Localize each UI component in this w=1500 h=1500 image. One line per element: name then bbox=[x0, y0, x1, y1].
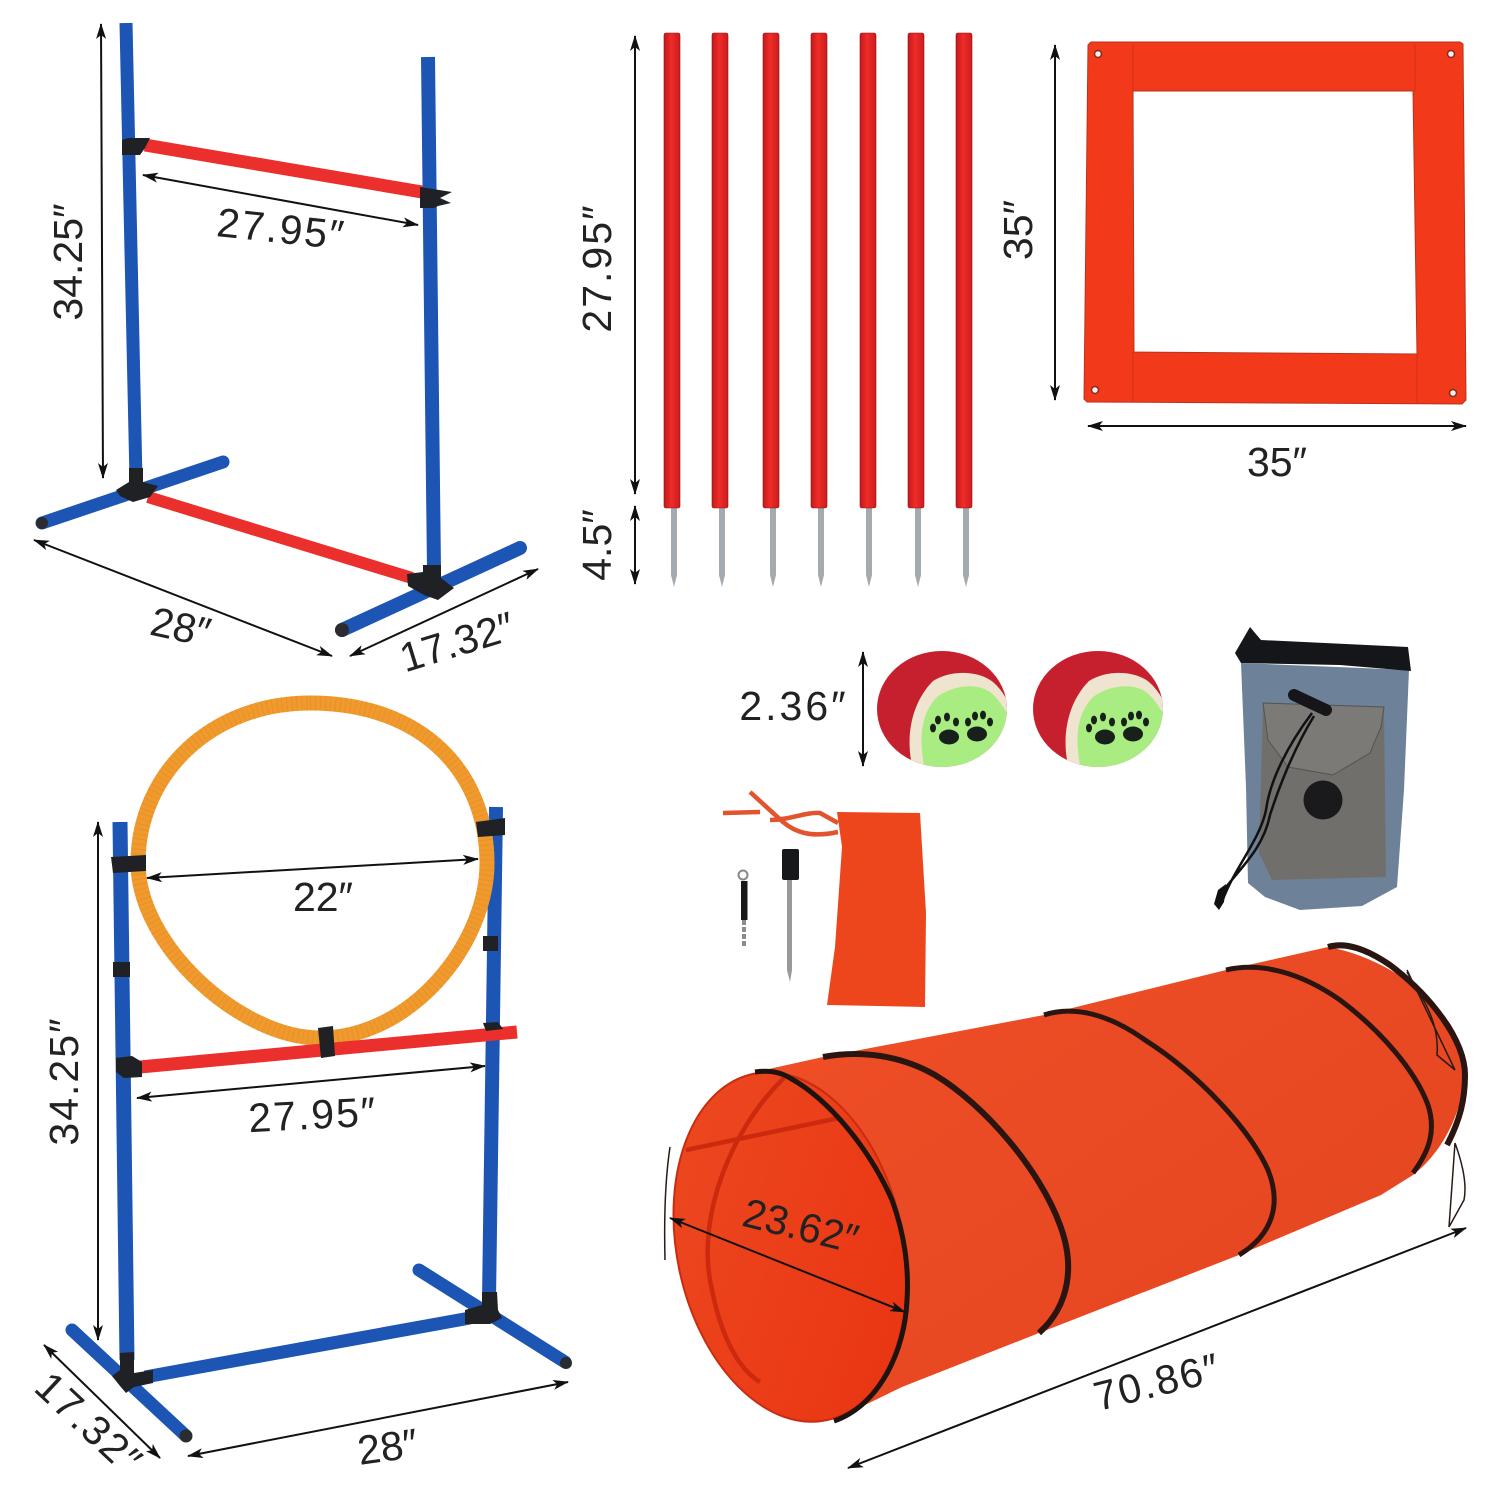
dimension: diameter 23.62 bbox=[670, 1189, 905, 1312]
dimension: diameter 23.62: 23.62″ bbox=[738, 1189, 863, 1262]
dimension: base 28: 28″ bbox=[355, 1420, 421, 1474]
dimension: length 70.86: 70.86″ bbox=[1089, 1344, 1225, 1420]
dimension: bar width 27.95: 27.95″ bbox=[215, 199, 348, 258]
dimension: hoop 22 bbox=[147, 859, 478, 920]
dimension: bar 27.95: 27.95″ bbox=[247, 1088, 379, 1141]
dimension: spike 4.5 bbox=[574, 506, 635, 584]
dimension: ball 2.36 bbox=[739, 652, 863, 766]
tunnel straps and strings bbox=[665, 970, 1465, 1260]
dimension: depth 17.32: 17.32″ bbox=[394, 603, 520, 681]
dimension: bar 27.95 bbox=[137, 1066, 485, 1141]
cord lock bbox=[1294, 695, 1326, 710]
pouch zipper band bbox=[1235, 627, 1411, 671]
draw cord bbox=[1222, 713, 1314, 902]
pouch pocket bbox=[1259, 703, 1386, 880]
ball left bbox=[877, 651, 1012, 775]
hurdle frame bbox=[36, 23, 520, 637]
dimension: pole 27.95: 27.95″ bbox=[574, 203, 620, 333]
cord tip bbox=[1214, 884, 1226, 910]
dimension: hoop 22: 22″ bbox=[293, 874, 353, 920]
panel: bar jump hurdle bbox=[34, 23, 538, 681]
inner strap bbox=[686, 1078, 839, 1382]
seven red poles with spikes bbox=[664, 33, 972, 587]
dimension: base 28: 28″ bbox=[146, 598, 215, 656]
dimension: height 34.25: 34.25″ bbox=[45, 203, 91, 321]
dimension: depth 17.32: 17.32″ bbox=[26, 1363, 152, 1485]
panel: tennis balls bbox=[739, 651, 1168, 775]
dimension: bar width 27.95 bbox=[143, 175, 418, 258]
front rim bbox=[755, 1071, 907, 1421]
hoop red crossbar and straps bbox=[111, 818, 572, 1442]
pocket flap bbox=[1263, 703, 1384, 775]
bag ties bbox=[723, 792, 838, 834]
ground peg bbox=[782, 849, 799, 982]
dimension: width 35: 35″ bbox=[1247, 439, 1307, 485]
dimension: ball 2.36: 2.36″ bbox=[739, 683, 849, 729]
dimension: length 70.86 bbox=[848, 1228, 1466, 1468]
tunnel opening bbox=[643, 1050, 937, 1444]
dimension: height 35: 35″ bbox=[995, 200, 1041, 260]
tunnel body bbox=[755, 947, 1465, 1420]
dimension: height 34.25: 34.25″ bbox=[41, 1016, 87, 1146]
pouch body bbox=[1241, 663, 1409, 910]
panel: whistle, peg and storage bag bbox=[723, 792, 926, 1007]
dimension: spike 4.5: 4.5″ bbox=[574, 509, 620, 581]
orange square frame bbox=[1084, 42, 1466, 404]
panel: hoop jump bbox=[26, 703, 572, 1485]
hoop frame poles bbox=[72, 807, 565, 1435]
dimension: base 28 bbox=[34, 540, 332, 656]
whistle bbox=[738, 870, 748, 946]
panel: tunnel bbox=[643, 945, 1466, 1468]
dimension: base 28 bbox=[188, 1382, 568, 1474]
icon: treat pouch bbox=[1214, 627, 1411, 910]
storage bag bbox=[827, 812, 926, 1007]
button bbox=[1304, 780, 1342, 820]
hoop bbox=[138, 703, 487, 1038]
panel: weave poles bbox=[574, 33, 972, 587]
tunnel rings bbox=[823, 945, 1465, 1333]
ball right bbox=[1033, 651, 1168, 775]
panel: pause box square bbox=[995, 42, 1466, 485]
dimension: depth 17.32 bbox=[350, 569, 538, 681]
